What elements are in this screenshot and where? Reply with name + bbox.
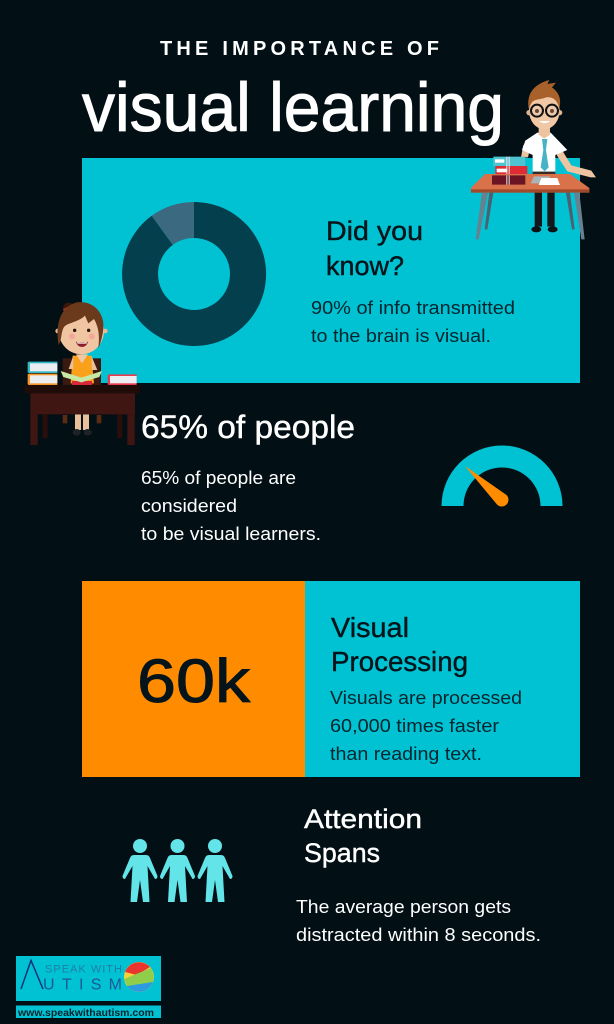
panel: 60k stat (82, 581, 305, 777)
logo: speak with autism: UTISM (43, 976, 122, 994)
heading: attention spans: Attention (304, 804, 422, 834)
heading: did you know: know? (326, 251, 404, 281)
donut chart: 90 percent (122, 202, 266, 346)
text: visual learners: considered (141, 496, 237, 516)
heading: did you know: Did you (326, 216, 423, 246)
text: processing speed: than reading text. (330, 744, 482, 764)
heading: visual processing: Processing (331, 646, 468, 677)
logo: speak with autism (16, 956, 161, 1019)
icon: woman at desk (25, 302, 140, 445)
title: visual learning: visual learning (82, 69, 504, 146)
logo letter A (21, 960, 43, 989)
panel: visual processing (305, 581, 580, 777)
logo: rainbow globe (124, 962, 154, 992)
gauge needle (465, 466, 508, 506)
heading: visual processing: Visual (331, 612, 409, 643)
icon: man at desk (471, 80, 596, 239)
text: processing speed: Visuals are processed (330, 688, 522, 708)
website url (16, 1006, 161, 1018)
title: the importance of: THE IMPORTANCE OF (160, 38, 439, 60)
gauge chart (442, 445, 562, 506)
text: distraction: distracted within 8 seconds. (296, 925, 541, 945)
heading: attention spans: Spans (304, 838, 380, 868)
stat: 60k: 60k (137, 647, 251, 715)
text: visual learners: to be visual learners. (141, 524, 321, 544)
text: 90 percent: to the brain is visual. (311, 326, 491, 346)
text: processing speed: 60,000 times faster (330, 716, 499, 736)
text: distraction: The average person gets (296, 897, 511, 917)
logo: speak with autism: SPEAK WITH (45, 964, 122, 976)
text: visual learners: 65% of people are (141, 468, 296, 488)
logo: speak with autism: www.speakwithautism.com (17, 1008, 154, 1019)
panel: did you know (82, 158, 580, 383)
text: 90 percent: 90% of info transmitted (311, 298, 515, 318)
heading: 65 percent of people: 65% of people (141, 409, 355, 445)
icon: three people (122, 839, 232, 902)
